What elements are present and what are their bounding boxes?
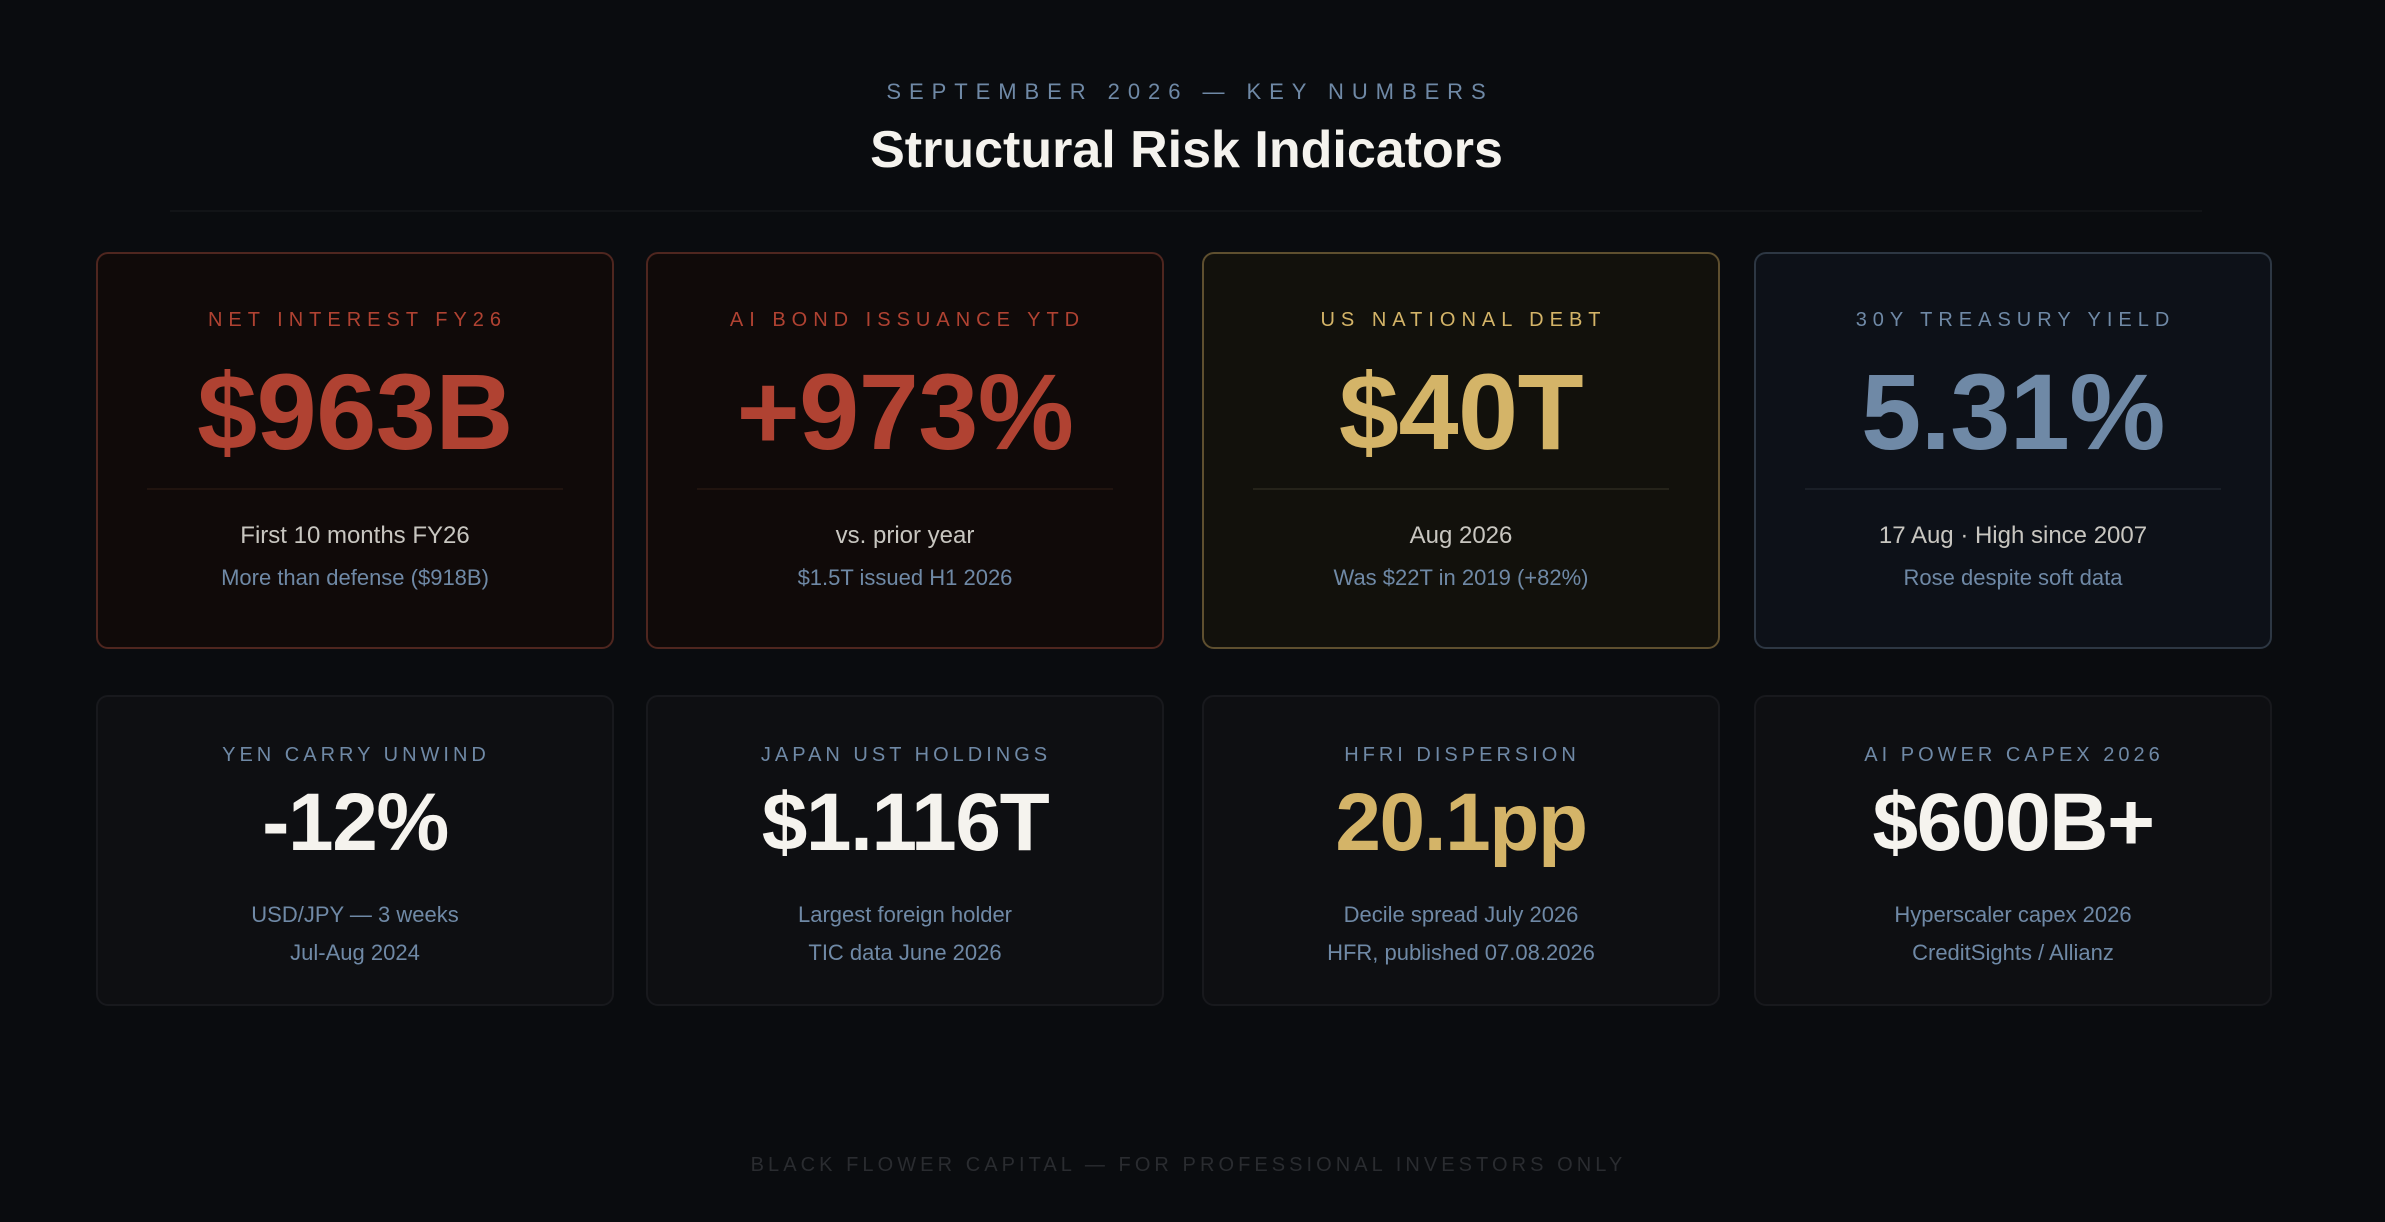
value: $40T xyxy=(1339,351,1583,472)
detail: First 10 months FY26 xyxy=(240,522,470,549)
panel: US national debt xyxy=(1202,252,1720,649)
detail line 1: Decile spread July 2026 xyxy=(1344,902,1578,927)
detail line 2: TIC data June 2026 xyxy=(808,940,1002,965)
panel: Japan UST holdings xyxy=(646,695,1164,1006)
value: $600B+ xyxy=(1872,777,2154,868)
label: NET INTEREST FY26 xyxy=(208,309,507,331)
value: +973% xyxy=(737,351,1073,472)
label: JAPAN UST HOLDINGS xyxy=(761,744,1051,766)
detail line 1: Largest foreign holder xyxy=(798,902,1012,927)
detail: 17 Aug · High since 2007 xyxy=(1879,522,2147,549)
value: 20.1pp xyxy=(1335,777,1587,868)
value: 5.31% xyxy=(1861,351,2165,472)
panel: AI bond issuance xyxy=(646,252,1164,649)
note: $1.5T issued H1 2026 xyxy=(798,565,1012,590)
header eyebrow: SEPTEMBER 2026 — KEY NUMBERS xyxy=(886,79,1494,104)
note: Rose despite soft data xyxy=(1904,565,2122,590)
panel: AI power capex xyxy=(1754,695,2272,1006)
detail line 2: CreditSights / Allianz xyxy=(1912,940,2114,965)
detail line 1: USD/JPY — 3 weeks xyxy=(251,902,459,927)
label: AI POWER CAPEX 2026 xyxy=(1864,744,2164,766)
detail line 1: Hyperscaler capex 2026 xyxy=(1894,902,2132,927)
note: More than defense ($918B) xyxy=(221,565,489,590)
panel: 30Y treasury yield xyxy=(1754,252,2272,649)
panel: net interest xyxy=(96,252,614,649)
footer: BLACK FLOWER CAPITAL — FOR PROFESSIONAL INVESTORS ONLY xyxy=(751,1154,1626,1176)
title: Structural Risk Indicators xyxy=(870,121,1503,179)
label: US NATIONAL DEBT xyxy=(1320,309,1607,331)
panel: HFRI dispersion xyxy=(1202,695,1720,1006)
value: $1.116T xyxy=(762,777,1048,868)
label: YEN CARRY UNWIND xyxy=(222,744,490,766)
detail: Aug 2026 xyxy=(1410,522,1512,549)
value: -12% xyxy=(262,777,448,868)
detail line 2: HFR, published 07.08.2026 xyxy=(1327,940,1595,965)
label: HFRI DISPERSION xyxy=(1344,744,1580,766)
detail: vs. prior year xyxy=(836,522,974,549)
note: Was $22T in 2019 (+82%) xyxy=(1334,565,1588,590)
panel: yen carry unwind xyxy=(96,695,614,1006)
label: AI BOND ISSUANCE YTD xyxy=(730,309,1085,331)
label: 30Y TREASURY YIELD xyxy=(1856,309,2175,331)
value: $963B xyxy=(197,351,513,472)
detail line 2: Jul-Aug 2024 xyxy=(290,940,420,965)
